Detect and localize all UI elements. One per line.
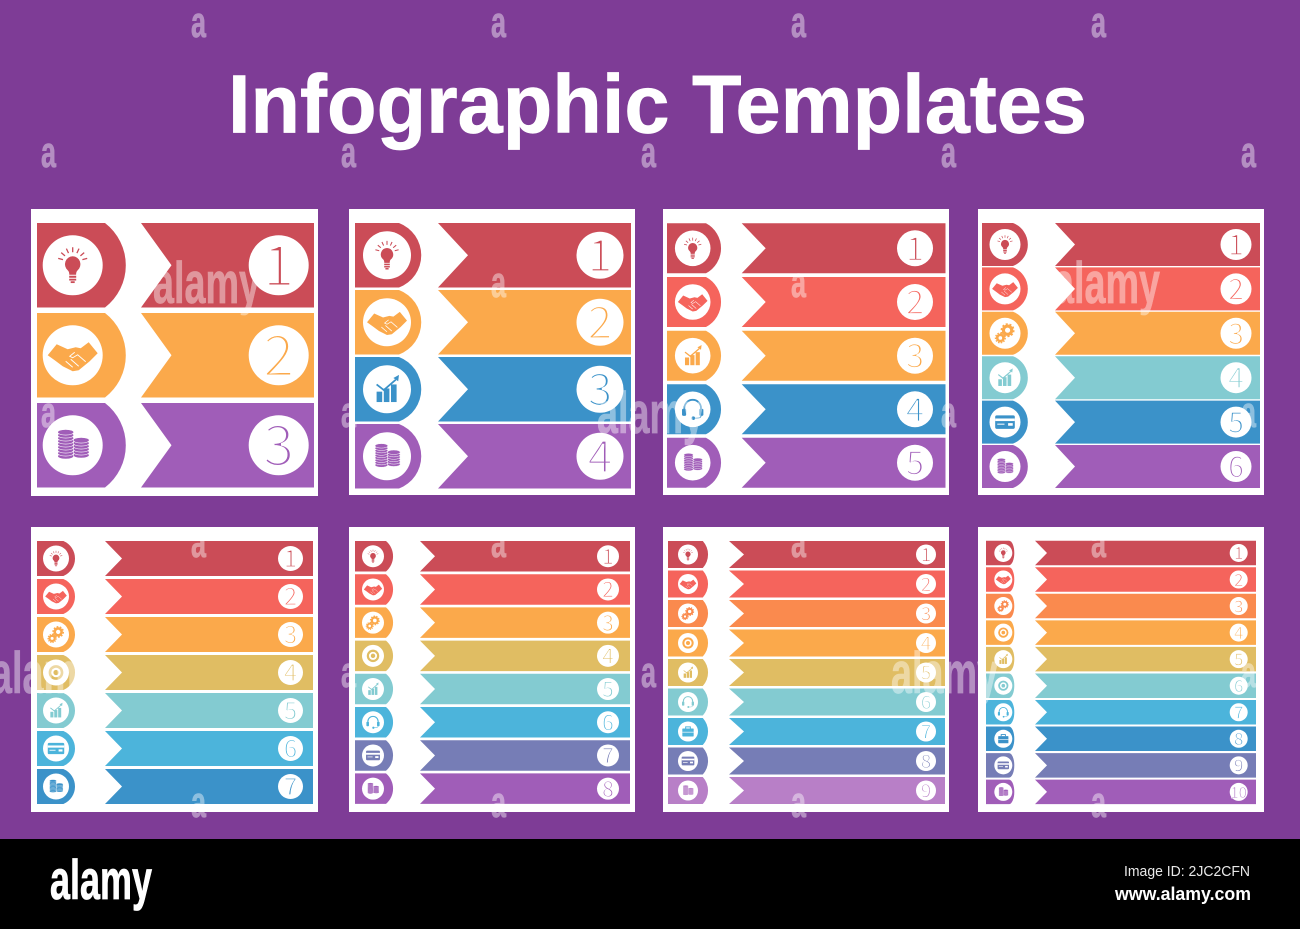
step 9: 9 bbox=[1234, 752, 1243, 777]
step 6: 6 bbox=[284, 729, 297, 764]
step 5 bbox=[668, 658, 945, 686]
step 1 bbox=[355, 541, 630, 572]
step 6 bbox=[982, 445, 1260, 488]
step 6 bbox=[986, 672, 1256, 698]
step 8: 8 bbox=[1234, 725, 1243, 750]
watermarks: a bbox=[341, 648, 356, 697]
step 7 bbox=[668, 717, 945, 745]
step 5 bbox=[986, 645, 1256, 671]
step 7: 7 bbox=[1234, 698, 1243, 724]
step 2: 2 bbox=[263, 311, 295, 393]
step 9 bbox=[986, 752, 1256, 778]
step 8: 8 bbox=[602, 773, 614, 803]
step 8 bbox=[986, 725, 1256, 751]
image id: Image ID: 2JC2CFN bbox=[1124, 863, 1250, 880]
panel: 6 steps bbox=[978, 209, 1264, 495]
step 10: 10 bbox=[1230, 782, 1247, 803]
step 3: 3 bbox=[263, 401, 295, 483]
step 2 bbox=[668, 570, 945, 598]
panel: 10 steps bbox=[978, 527, 1264, 812]
step 5 bbox=[355, 674, 630, 704]
step 1: 1 bbox=[263, 221, 295, 303]
watermarks: a bbox=[491, 778, 506, 827]
step 3: 3 bbox=[588, 354, 612, 418]
step 7: 7 bbox=[921, 717, 931, 744]
step 1 bbox=[37, 539, 313, 576]
step 6: 6 bbox=[1234, 672, 1243, 697]
step 6 bbox=[37, 729, 313, 766]
step 9: 9 bbox=[921, 776, 931, 803]
step 8: 8 bbox=[921, 747, 931, 774]
watermarks: alamy bbox=[153, 251, 260, 316]
step 1 bbox=[37, 221, 314, 308]
step 3 bbox=[668, 599, 945, 627]
step 1 bbox=[668, 540, 945, 568]
step 3: 3 bbox=[906, 330, 924, 378]
watermarks: a bbox=[641, 128, 656, 177]
watermarks: a bbox=[791, 518, 806, 567]
step 4: 4 bbox=[284, 653, 297, 688]
step 1 bbox=[355, 220, 631, 288]
watermarks: alamy bbox=[597, 381, 704, 446]
step 1: 1 bbox=[602, 541, 614, 571]
step 7: 7 bbox=[284, 767, 297, 802]
step 4: 4 bbox=[602, 640, 614, 670]
watermarks: a bbox=[491, 518, 506, 567]
footer logo: alamy bbox=[50, 848, 152, 911]
panel: 9 steps bbox=[663, 527, 949, 812]
title: Infographic Templates bbox=[228, 58, 1087, 150]
watermarks: alamy bbox=[891, 641, 998, 706]
watermarks: a bbox=[491, 258, 506, 307]
step 4: 4 bbox=[921, 629, 931, 656]
step 6: 6 bbox=[921, 688, 931, 715]
step 5: 5 bbox=[1234, 645, 1243, 670]
step 4 bbox=[355, 640, 630, 671]
step 8 bbox=[355, 773, 630, 804]
step 1 bbox=[986, 539, 1256, 565]
step 2 bbox=[982, 267, 1260, 310]
watermarks: a bbox=[41, 128, 56, 177]
step 3 bbox=[37, 615, 313, 652]
step 2 bbox=[355, 286, 631, 354]
step 3 bbox=[37, 401, 314, 488]
step 1: 1 bbox=[588, 220, 612, 284]
step 2: 2 bbox=[588, 286, 612, 352]
step 3: 3 bbox=[1228, 312, 1244, 353]
step 4: 4 bbox=[906, 383, 924, 431]
step 3 bbox=[355, 354, 631, 422]
step 3 bbox=[355, 607, 630, 638]
step 4: 4 bbox=[588, 420, 612, 486]
step 3: 3 bbox=[284, 615, 297, 650]
step 2: 2 bbox=[284, 577, 297, 612]
step 9 bbox=[668, 776, 945, 804]
step 2: 2 bbox=[921, 570, 931, 597]
step 6: 6 bbox=[1228, 445, 1244, 486]
panel: 3 steps bbox=[31, 209, 318, 496]
watermarks: a bbox=[41, 388, 56, 437]
watermarks: a bbox=[941, 128, 956, 177]
step 5 bbox=[667, 437, 946, 488]
watermarks: a bbox=[1241, 648, 1256, 697]
step 1: 1 bbox=[1228, 223, 1244, 264]
step 5 bbox=[37, 691, 313, 728]
footer bar bbox=[0, 839, 1300, 929]
step 4: 4 bbox=[1228, 356, 1244, 397]
step 5 bbox=[982, 401, 1260, 444]
step 4 bbox=[37, 653, 313, 690]
panel: 5 steps bbox=[663, 209, 949, 495]
step 2 bbox=[986, 566, 1256, 592]
step 1: 1 bbox=[1234, 539, 1243, 564]
watermarks: a bbox=[941, 388, 956, 437]
step 2: 2 bbox=[906, 276, 924, 324]
step 3 bbox=[667, 330, 946, 381]
step 3: 3 bbox=[1234, 592, 1243, 617]
step 7 bbox=[37, 767, 313, 804]
website: www.alamy.com bbox=[1114, 884, 1251, 904]
watermarks: a bbox=[341, 128, 356, 177]
step 1: 1 bbox=[284, 539, 297, 574]
step 2 bbox=[667, 276, 946, 327]
step 5: 5 bbox=[906, 437, 924, 485]
step 5: 5 bbox=[284, 691, 297, 726]
step 3 bbox=[982, 312, 1260, 355]
watermarks: a bbox=[641, 648, 656, 697]
watermarks: a bbox=[341, 388, 356, 437]
step 7 bbox=[355, 740, 630, 771]
step 6: 6 bbox=[602, 707, 614, 737]
step 1: 1 bbox=[906, 222, 924, 270]
step 7 bbox=[986, 698, 1256, 724]
step 5: 5 bbox=[1228, 401, 1244, 442]
watermarks: alamy bbox=[1053, 251, 1160, 316]
step 5: 5 bbox=[921, 658, 931, 685]
step 3: 3 bbox=[602, 607, 614, 637]
step 6 bbox=[355, 707, 630, 738]
step 1 bbox=[982, 223, 1260, 266]
step 4 bbox=[355, 420, 631, 488]
step 1: 1 bbox=[921, 540, 931, 567]
step 2 bbox=[37, 311, 314, 398]
watermarks: a bbox=[1091, 518, 1106, 567]
watermarks: a bbox=[791, 778, 806, 827]
watermarks: a bbox=[1241, 388, 1256, 437]
step 4 bbox=[986, 619, 1256, 645]
step 8 bbox=[668, 747, 945, 774]
step 7: 7 bbox=[602, 740, 614, 770]
step 4 bbox=[982, 356, 1260, 399]
step 2 bbox=[355, 574, 630, 605]
watermarks: a bbox=[1241, 128, 1256, 177]
watermarks: a bbox=[191, 778, 206, 827]
step 3: 3 bbox=[921, 599, 931, 626]
panel: 4 steps bbox=[349, 209, 635, 495]
watermarks: a bbox=[791, 258, 806, 307]
panel: 8 steps bbox=[349, 527, 635, 812]
step 4 bbox=[668, 629, 945, 656]
step 2: 2 bbox=[1228, 267, 1244, 308]
step 6 bbox=[668, 688, 945, 716]
step 2 bbox=[37, 577, 313, 614]
panel: 7 steps bbox=[31, 527, 318, 812]
step 2: 2 bbox=[1234, 566, 1243, 591]
watermarks: a bbox=[191, 518, 206, 567]
step 3 bbox=[986, 592, 1256, 618]
step 4 bbox=[667, 383, 946, 434]
step 2: 2 bbox=[602, 574, 614, 604]
step 10 bbox=[986, 780, 1256, 804]
step 5: 5 bbox=[602, 674, 614, 704]
step 1 bbox=[667, 222, 946, 273]
step 4: 4 bbox=[1234, 619, 1243, 644]
watermarks: a bbox=[1091, 778, 1106, 827]
